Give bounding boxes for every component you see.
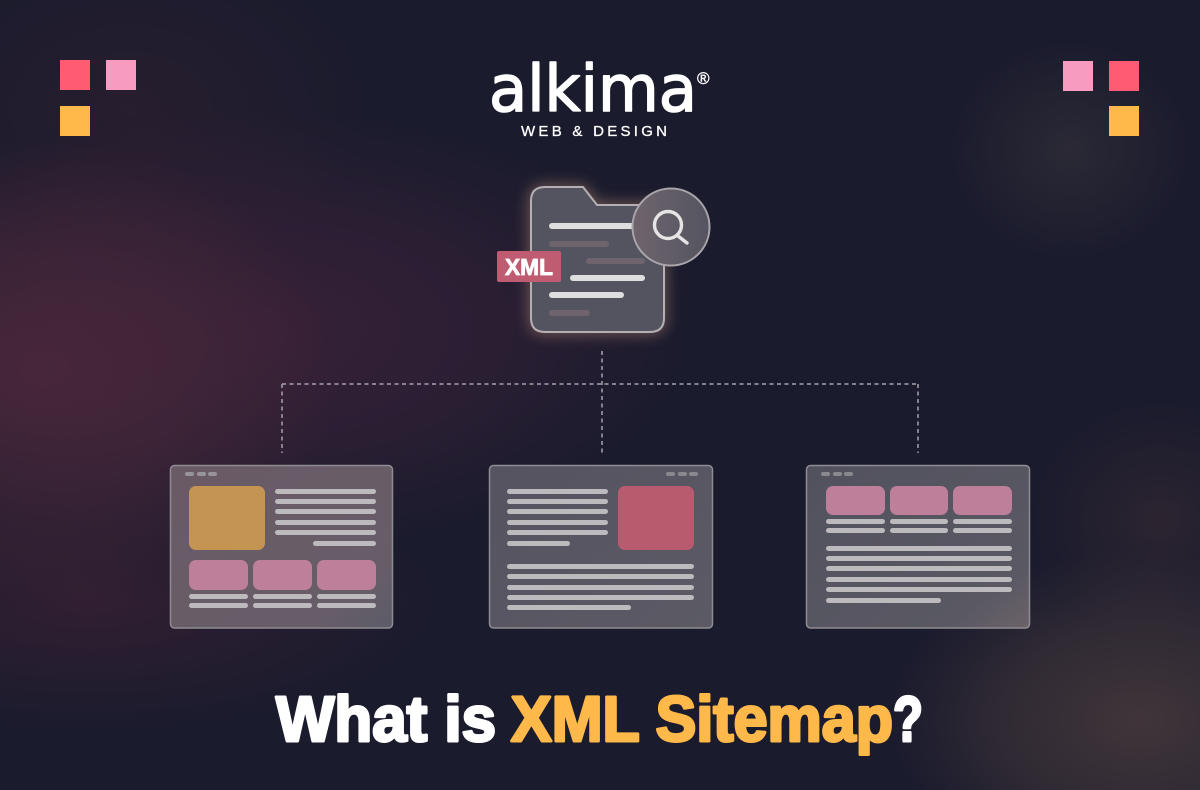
logo: alkima web and design: WEB & DESIGN xyxy=(521,123,667,140)
icon: XML document folder with magnifier xyxy=(497,187,710,332)
icon: decorative squares top right xyxy=(1063,61,1139,136)
connector: dashed tree lines xyxy=(282,351,918,455)
pink cards xyxy=(826,486,1012,515)
icon: decorative squares top left xyxy=(60,60,136,136)
image block orange xyxy=(189,486,265,550)
panel: page window centre xyxy=(490,466,712,628)
title: ? xyxy=(893,683,923,755)
logo: alkima web and design: ® xyxy=(697,69,710,88)
window dots xyxy=(821,472,853,476)
folder glow xyxy=(531,187,664,332)
panel: page window left xyxy=(170,466,392,628)
panel: page window right xyxy=(806,466,1030,628)
folder body xyxy=(531,187,664,332)
text lines xyxy=(826,519,1012,603)
XML tag xyxy=(497,251,561,282)
text lines xyxy=(507,489,694,610)
window dots xyxy=(666,472,698,476)
magnifier badge xyxy=(632,188,710,266)
folder text lines xyxy=(552,226,642,313)
title: What is xyxy=(276,683,496,755)
magnifier glyph xyxy=(654,212,687,243)
image block red xyxy=(618,486,694,550)
window dots xyxy=(185,472,217,476)
XML tag: XML xyxy=(505,254,553,280)
text lines xyxy=(189,489,376,608)
title xyxy=(276,683,923,755)
title: XML Sitemap xyxy=(511,683,893,755)
logo: alkima web and design: alkima xyxy=(489,53,697,127)
pink cards xyxy=(189,560,376,590)
